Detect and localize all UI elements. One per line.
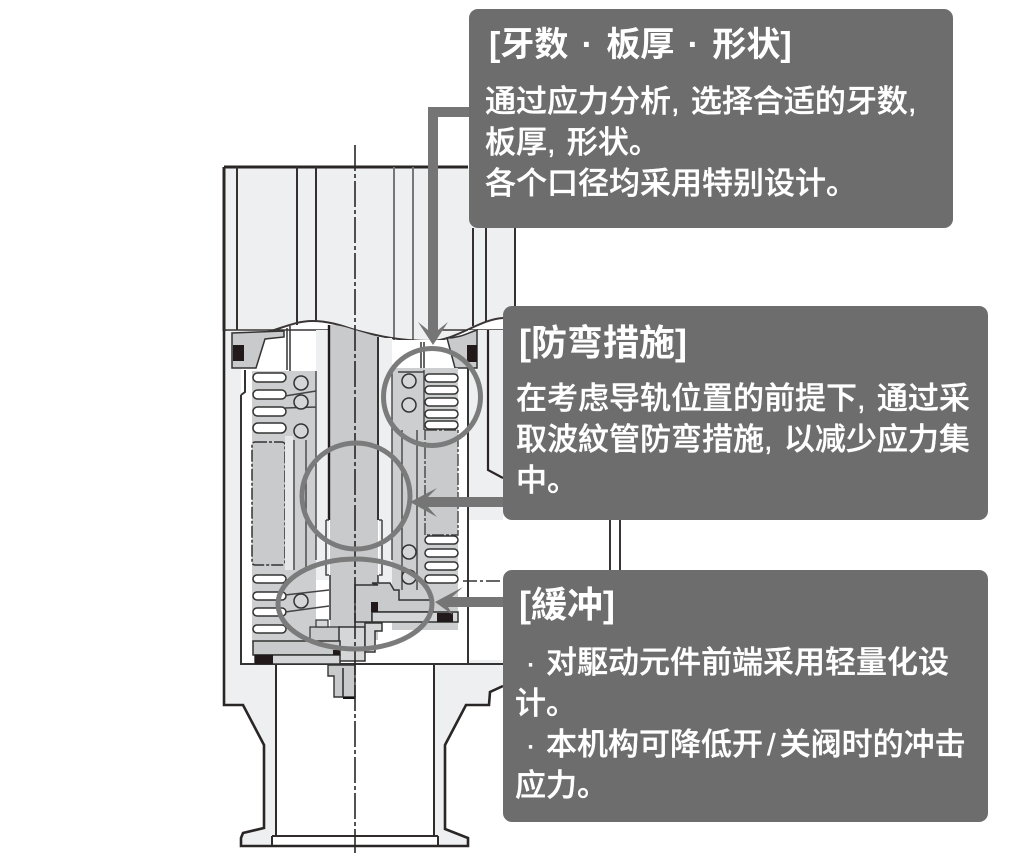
heading: teeth, thickness and shape: · (582, 26, 593, 64)
text block: anti-bending description: 在考虑导轨位置的前提下, 通过采 (516, 381, 970, 416)
highlight circle: bellows teeth (384, 348, 480, 446)
arrow: anti-bending callout (410, 488, 510, 517)
left seal housing (232, 326, 392, 583)
text block: anti-bending description: 中。 (516, 463, 578, 498)
highlight circle: anti-bending (302, 443, 410, 549)
text block: teeth description: 各个口径均采用特别设计。 (485, 166, 857, 201)
text block: cushioning description: 本机构可降低开/关阀时的冲击 (546, 727, 966, 762)
text block: teeth description: 通过应力分析, 选择合适的牙数, (485, 84, 916, 119)
text block: teeth description: 板厚, 形状。 (485, 125, 660, 160)
right seal housing (421, 330, 477, 372)
heading: cushioning: [緩冲] (519, 584, 615, 625)
panel: cushioning (503, 570, 988, 822)
heading: anti-bending measures: [防弯措施] (519, 322, 687, 363)
text block: cushioning description: 应力。 (515, 768, 608, 803)
panel: anti-bending measures (503, 306, 988, 520)
text block: cushioning description: · (525, 727, 536, 762)
text block: cushioning description: 计。 (515, 686, 577, 721)
text block: cushioning description: 对駆动元件前端采用轻量化设 (546, 645, 949, 680)
text block: cushioning description (515, 645, 966, 803)
valve body: lower housing and outlet (224, 330, 620, 846)
highlight ellipse: cushioning (278, 559, 432, 649)
left bellows (252, 371, 329, 643)
lower disk and stem assembly (253, 583, 458, 698)
text block: cushioning description: · (525, 645, 536, 680)
valve body: upper housing (224, 167, 515, 341)
text block: anti-bending description: 取波紋管防弯措施, 以减少应力集 (516, 422, 970, 457)
arrow: cushioning callout (435, 587, 510, 615)
centre line (354, 145, 356, 853)
text block: anti-bending description (516, 381, 970, 498)
right bellows (392, 368, 458, 630)
panel: teeth, thickness and shape (469, 9, 953, 228)
arrow: teeth callout (418, 107, 480, 345)
heading: teeth, thickness and shape: · (688, 26, 699, 64)
text block: teeth description (485, 84, 916, 201)
central shaft (326, 325, 382, 640)
heading: teeth, thickness and shape: [牙数 板厚 形状] (489, 26, 792, 64)
